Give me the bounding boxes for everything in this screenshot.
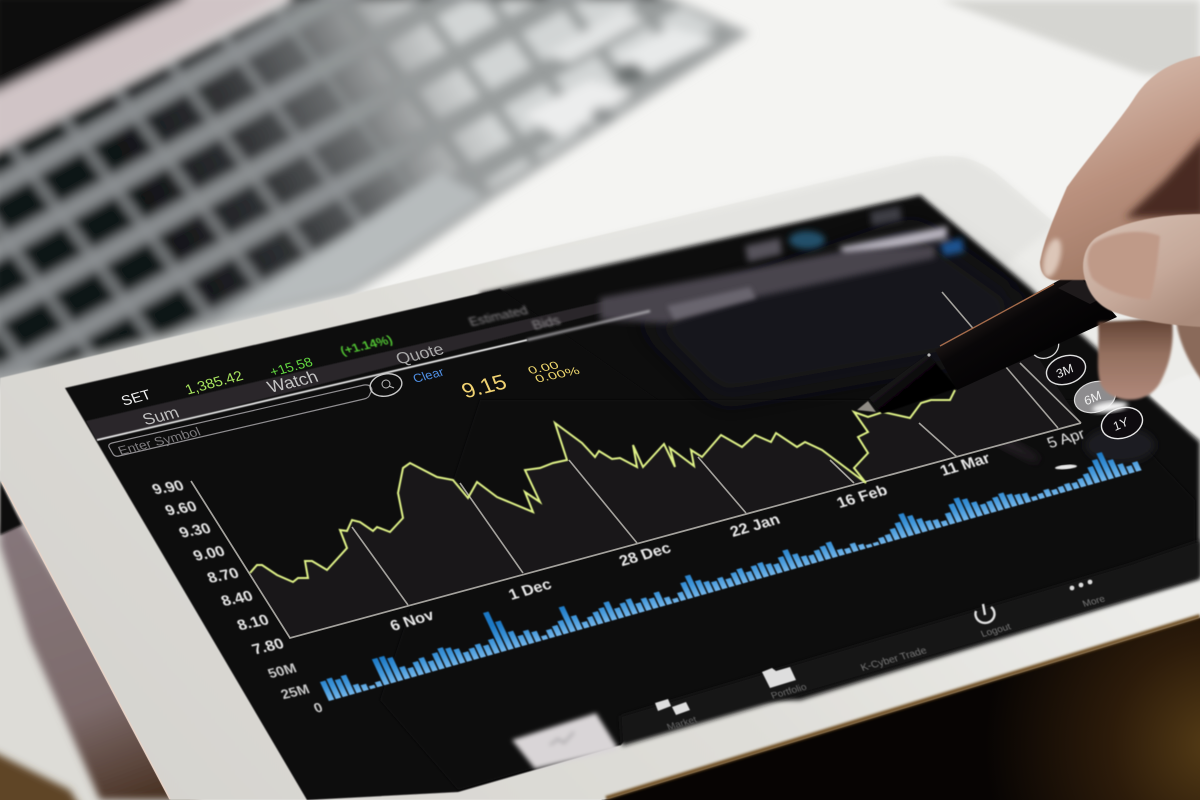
- more dots and label: More: [1081, 594, 1107, 610]
- index fingertip highlight: [1039, 237, 1065, 279]
- hand reflection on screen: [957, 413, 1155, 467]
- thumb: [1083, 214, 1200, 327]
- y axis price labels: 8.10: [235, 612, 272, 634]
- pen cone: [869, 354, 957, 414]
- x axis date labels: [388, 426, 1088, 635]
- last price: 9.15: [458, 370, 510, 403]
- tabs band far: [600, 245, 935, 323]
- x axis date labels: 16 Feb: [834, 482, 890, 512]
- tab bids: Bids: [529, 312, 563, 333]
- portfolio folder icon and label: [762, 667, 809, 702]
- laptop: blurred keyboard and screen: [0, 0, 750, 388]
- tablet screen: [65, 195, 1200, 800]
- laptop rose palm strip: [0, 0, 300, 155]
- button 6M selected: 6M: [1082, 388, 1103, 408]
- volume axis labels: 50M: [265, 660, 299, 681]
- portfolio folder icon and label: Portfolio: [769, 682, 809, 702]
- tab quote: Quote: [393, 340, 447, 368]
- volume axis labels: 0: [311, 699, 325, 716]
- far screen purple tint: [640, 225, 1020, 400]
- clear link: Clear: [411, 365, 446, 386]
- x axis date labels: 5 Apr: [1045, 426, 1088, 452]
- keyboard space bar: [213, 172, 483, 323]
- x axis date labels: 1 Dec: [506, 576, 554, 604]
- price change: 0.00: [525, 359, 561, 376]
- more dots and label: [1070, 580, 1107, 610]
- thumb nail: [1088, 232, 1160, 300]
- price change percent: 0.00%: [533, 365, 582, 385]
- y axis price labels: 9.90: [150, 478, 187, 498]
- hand holding the pen: [1039, 55, 1200, 440]
- index change: +15.58: [267, 355, 315, 379]
- market icon and label: Market: [665, 715, 699, 733]
- area under the price line: [250, 330, 1081, 638]
- chart axes: [191, 423, 1081, 638]
- laptop screen dark corner: [0, 0, 190, 95]
- logout icon and label: [975, 604, 1013, 640]
- price line: [250, 390, 955, 582]
- volume bar chart: [311, 431, 1142, 701]
- tab watch: Watch: [264, 367, 321, 396]
- y axis price labels: [150, 478, 287, 658]
- pen metal tip: [857, 401, 876, 412]
- finger crease shadow: [1125, 135, 1200, 218]
- logout icon and label: Logout: [979, 622, 1013, 640]
- under tablet: shadow band and table: [0, 480, 200, 800]
- keyboard large light keys: [545, 10, 645, 62]
- volume axis labels: [265, 660, 325, 716]
- right finger: [1176, 322, 1200, 385]
- button 1Y: 1Y: [1111, 414, 1131, 434]
- market icon and label: [655, 699, 699, 733]
- x axis date labels: 28 Dec: [617, 540, 674, 570]
- time range buttons: [1027, 329, 1147, 444]
- x axis date labels: 11 Mar: [938, 450, 993, 480]
- index change percent: (+1.14%): [338, 333, 395, 358]
- screen far area, out of focus: [480, 195, 1200, 700]
- index value: 1,385.42: [183, 369, 246, 398]
- desk in dark lower right corner: [585, 610, 1200, 800]
- pen clip gloss: [1058, 276, 1098, 304]
- y axis price labels: 9.30: [177, 521, 214, 541]
- keyboard keys: [0, 0, 735, 380]
- selected chart tab: [512, 713, 619, 769]
- button 3M: 3M: [1054, 361, 1075, 381]
- y axis price labels: 8.70: [205, 565, 242, 587]
- pen collar dot: [927, 353, 931, 357]
- white glare on volume bars: [1055, 464, 1077, 470]
- y axis price labels: 9.00: [191, 543, 228, 564]
- bottom menu band: [620, 540, 1200, 746]
- screen near area: [65, 289, 800, 800]
- bezel left edge highlight: [2, 482, 170, 799]
- keyboard frame: [0, 0, 750, 388]
- volume axis labels: 25M: [278, 681, 312, 702]
- market index: SET: [119, 387, 154, 409]
- price chart: [191, 292, 1081, 638]
- lower finger: [1098, 318, 1173, 400]
- x axis date labels: 22 Jan: [728, 511, 783, 541]
- search button: [368, 371, 404, 399]
- bezel gold edge: [606, 616, 1200, 798]
- pen body: [935, 270, 1117, 390]
- tabs band near: [86, 300, 620, 441]
- bottom navigation bar: [512, 580, 1107, 769]
- bezel soft blurred far edge: [500, 158, 1055, 300]
- tab estimated: Estimated: [466, 303, 530, 329]
- y axis price labels: 9.60: [163, 499, 200, 519]
- white bezel glare right of hand: [1150, 372, 1200, 440]
- vertical date gridlines: [352, 292, 1081, 605]
- index finger: [1040, 55, 1200, 280]
- y axis price labels: 7.80: [250, 636, 287, 658]
- pen highlight: [940, 284, 1054, 346]
- far status strip items: [745, 206, 964, 262]
- keyboard small dark keys: [616, 63, 644, 83]
- x axis date labels: 6 Nov: [388, 607, 437, 635]
- trade label: K-Cyber Trade: [859, 646, 929, 674]
- symbol input box: [109, 385, 372, 458]
- fingertip glare on screen: [1091, 400, 1129, 414]
- far input box: [667, 287, 756, 320]
- tab sum: Sum: [140, 403, 182, 429]
- button 1M partial: [1027, 329, 1063, 363]
- y axis price labels: 8.40: [219, 588, 256, 610]
- symbol input box: Enter Symbol: [116, 425, 203, 458]
- tabs underline: [97, 340, 527, 440]
- header text: [109, 303, 582, 458]
- pen stylus: [857, 270, 1117, 414]
